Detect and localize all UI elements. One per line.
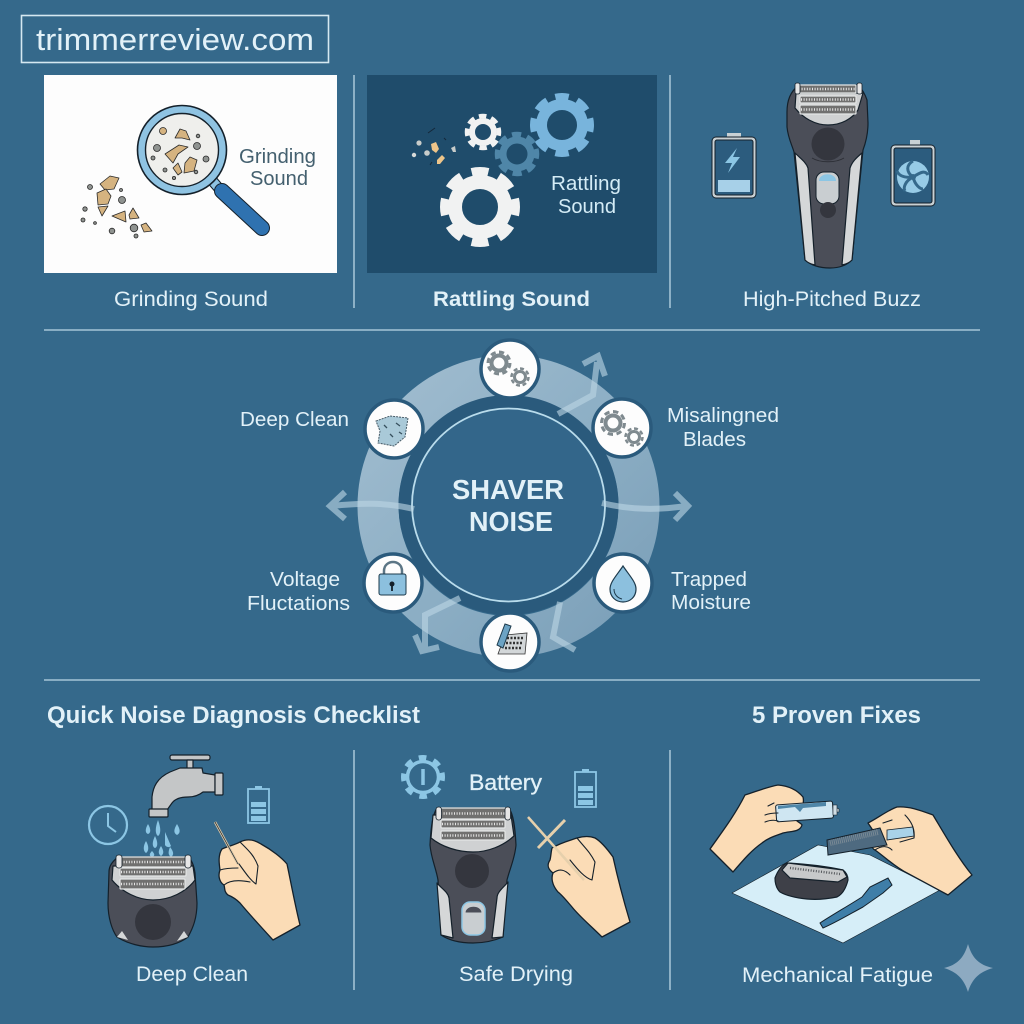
label: trapped moisture: Moisture [671,592,751,614]
icon: shaver head on towel [775,863,848,899]
icon: sparkle star [944,944,993,992]
label: misaligned blades: Misalingned [667,405,779,427]
illustration: mechanical fatigue repair [710,785,972,943]
label: rattling sound: Rattling Sound [433,288,590,311]
label: deep clean: Deep Clean [240,409,349,431]
node: debris cluster [365,400,423,458]
label: trapped moisture [671,569,751,614]
icon: scattered debris [81,176,152,238]
node: foil and blade [481,613,539,671]
arrow: bottom left [415,598,460,651]
label: voltage fluctuations [247,569,350,615]
text: grinding sound inside panel: Sound [250,168,308,190]
paper towel [732,845,940,943]
icon: blue gear [534,97,590,153]
text: rattling sound inside panel: Sound [558,196,616,218]
icon: large white gear [445,172,515,242]
panel: rattling sound [367,75,657,273]
label: high-pitched buzz: High-Pitched Buzz [743,288,921,311]
label: deep clean caption: Deep Clean [136,963,248,986]
logo box: trimmerreview.com [22,16,328,62]
icon: small battery [248,786,269,823]
arrow: left [330,492,414,519]
icon: small battery [575,769,596,807]
text: rattling sound inside panel: Rattling [551,173,621,195]
label: trapped moisture: Trapped [671,569,747,591]
icon: small white gear [467,116,499,148]
icon: water drops [144,820,180,857]
node: misaligned gears [593,399,651,457]
panel: grinding sound [44,75,337,273]
node: water drop [594,554,652,612]
icon: gear with figure [404,758,442,796]
icon: left hand with tube [710,785,839,872]
illustration: safe drying [404,758,630,943]
icon: rattling debris [412,128,456,165]
heading: 5 proven fixes: 5 Proven Fixes [752,702,921,729]
icon: shaver head [108,855,197,947]
icon: fan battery [891,140,935,206]
heading: quick noise diagnosis checklist: Quick Noise Diagnosis Checklist [47,702,420,729]
icon: hand with tool [215,822,300,940]
center circle with title: SHAVER [452,474,564,505]
label: mechanical fatigue caption: Mechanical Fatigue [742,964,933,987]
node: top gears [481,340,539,398]
icon: shaver [787,83,868,268]
illustration: shaver with battery and fan [712,83,935,268]
inner dark band and center circle [398,395,618,615]
text: grinding sound inside panel: Grinding [239,146,316,168]
icon: battery with bolt [712,133,756,198]
label: safe drying caption: Safe Drying [459,963,573,986]
icon: faucet [149,755,223,817]
label: grinding sound: Grinding Sound [114,288,268,311]
label: voltage fluctuations: Voltage [270,569,340,591]
node: padlock [364,554,422,612]
text: grinding sound inside panel [239,146,316,190]
label: misaligned blades [667,405,779,451]
label: battery: Battery [469,770,542,795]
text: rattling sound inside panel [551,173,621,218]
center circle with title: NOISE [469,506,553,537]
outer ring [378,376,639,636]
icon: cleaning brush [820,878,892,928]
label: misaligned blades: Blades [683,429,746,451]
icon: clock [89,806,127,844]
label: voltage fluctuations: Fluctations [247,593,350,615]
logo box: trimmerreview.com: trimmerreview.com [36,22,314,57]
icon: magnifying glass [138,106,262,228]
icon: right hand with comb [827,807,972,895]
diagram: shaver noise cycle [330,340,688,671]
arrow: right [602,493,688,520]
arrow: bottom right [553,602,575,650]
illustration: deep clean [89,755,300,947]
center circle with title [412,408,605,602]
icon: hand with crossed tools [528,817,630,937]
icon: shaver [430,807,516,943]
arrow: top right [558,356,605,414]
icon: mid gear [498,134,536,174]
